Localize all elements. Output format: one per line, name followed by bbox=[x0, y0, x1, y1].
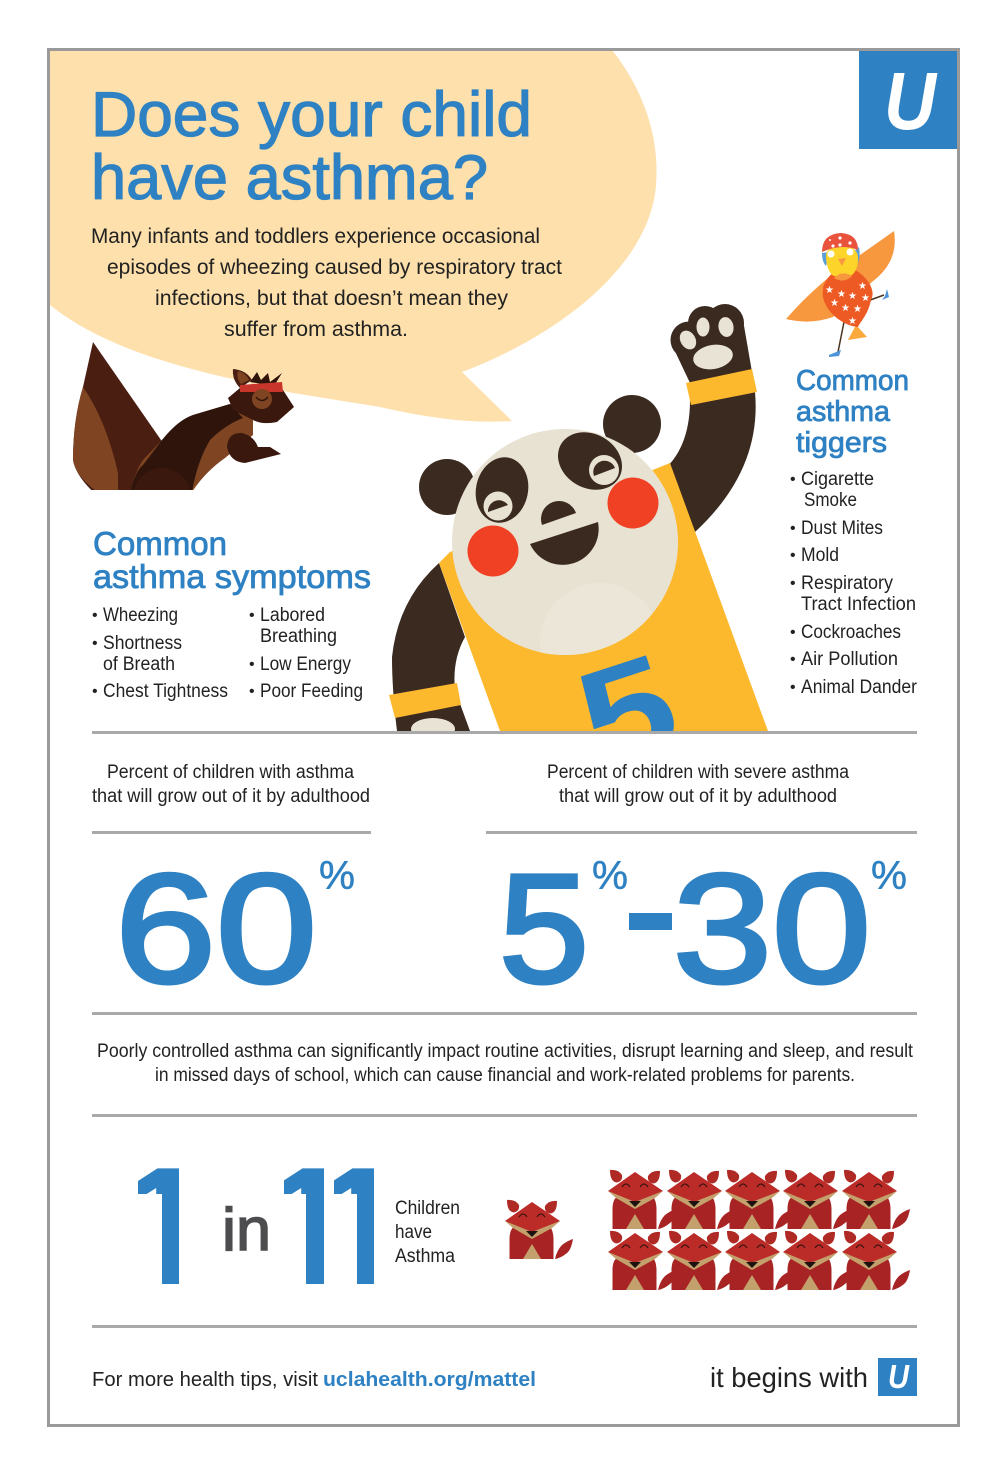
list: triggers: • bbox=[790, 624, 796, 641]
list: triggers: • bbox=[790, 679, 796, 696]
footer U logo bbox=[878, 1358, 917, 1396]
stat caption: 60 percent: Percent of children with asthma bbox=[107, 762, 354, 783]
logo: U badge bbox=[859, 51, 957, 149]
stat: 1 in 11: 1 bbox=[312, 1132, 405, 1320]
list: triggers: Smoke bbox=[804, 490, 857, 511]
list: triggers: Tract Infection bbox=[801, 594, 916, 615]
intro text: Many infants and toddlers experience occasional bbox=[91, 225, 540, 248]
icon: bird: ★ bbox=[858, 281, 867, 292]
icon: bird: ★ bbox=[837, 289, 846, 300]
heading: symptoms: Common bbox=[93, 525, 227, 562]
intro text: episodes of wheezing caused by respiratory tract bbox=[107, 256, 562, 279]
mouth bbox=[530, 522, 599, 565]
stat: 60%: 60 bbox=[115, 842, 317, 1015]
stat caption: 5-30 percent: that will grow out of it by adulthood bbox=[559, 786, 837, 807]
title bbox=[91, 80, 532, 213]
icon: bird: ★ bbox=[841, 303, 850, 314]
heading: symptoms bbox=[93, 525, 371, 595]
list: symptoms: Poor Feeding bbox=[260, 681, 363, 702]
stat label: have bbox=[395, 1222, 432, 1243]
list: triggers: Animal Dander bbox=[801, 677, 918, 698]
stat label: Children bbox=[395, 1198, 460, 1219]
list: symptoms: Breathing bbox=[260, 626, 337, 647]
stat caption: 60 percent bbox=[92, 762, 370, 807]
paw pads raised bbox=[680, 317, 734, 370]
icon: bird: ★ bbox=[861, 293, 870, 304]
raised paw bbox=[670, 304, 752, 385]
title: Does your child bbox=[91, 80, 532, 150]
intro text bbox=[91, 225, 562, 341]
list: symptoms: Shortness bbox=[103, 633, 182, 654]
list: triggers: Mold bbox=[801, 545, 839, 566]
stat: 1 in 11 bbox=[138, 1168, 374, 1284]
stat caption: 5-30 percent bbox=[547, 762, 849, 807]
stat: 1 in 11: 1 bbox=[117, 1132, 210, 1320]
heading: triggers bbox=[796, 365, 909, 459]
icon: bird: ★ bbox=[825, 285, 834, 296]
list: symptoms: Labored bbox=[260, 605, 325, 626]
divider lines bbox=[92, 731, 917, 1328]
list: triggers: • bbox=[790, 575, 796, 592]
stat: 5-30%: % bbox=[871, 854, 907, 898]
lower paw pad bbox=[411, 718, 455, 731]
list: symptoms: Chest Tightness bbox=[103, 681, 228, 702]
icon: bird: ★ bbox=[848, 291, 857, 302]
stat: 60%: % bbox=[319, 854, 355, 898]
list: triggers: • bbox=[790, 471, 796, 488]
stat: 1 in 11: in bbox=[222, 1196, 271, 1263]
list: symptoms: Wheezing bbox=[103, 605, 178, 626]
list: triggers: • bbox=[790, 547, 796, 564]
stat: 5-30% bbox=[499, 842, 907, 1015]
icon: bird bbox=[786, 231, 895, 357]
list: symptoms: • bbox=[92, 635, 98, 652]
footer U logo: U bbox=[888, 1358, 910, 1395]
list: symptoms: Low Energy bbox=[260, 654, 351, 675]
jersey bbox=[439, 463, 768, 731]
icon: squirrel bbox=[73, 342, 294, 490]
icon: single fox bbox=[505, 1200, 573, 1259]
list: symptoms: • bbox=[249, 656, 255, 673]
icon: panda bbox=[389, 304, 768, 731]
list: symptoms: • bbox=[249, 683, 255, 700]
impact paragraph: in missed days of school, which can cause financial and work-related problems for parents. bbox=[155, 1065, 855, 1086]
logo: U badge: U bbox=[884, 56, 938, 147]
list: triggers: Dust Mites bbox=[801, 518, 883, 539]
belly bbox=[540, 614, 652, 655]
left arm bbox=[392, 563, 470, 731]
heading: triggers: Common bbox=[796, 365, 909, 397]
heading: triggers: asthma bbox=[796, 396, 891, 428]
stat: 1 in 11: 1 bbox=[262, 1132, 355, 1320]
icon: bird: ★ bbox=[848, 316, 857, 327]
list: triggers: • bbox=[790, 520, 796, 537]
intro text: suffer from asthma. bbox=[224, 318, 408, 341]
stat caption: 5-30 percent: Percent of children with severe asthma bbox=[547, 762, 849, 783]
footer link text: For more health tips, visit bbox=[92, 1369, 318, 1391]
wrist bands bbox=[389, 369, 757, 718]
right arm bbox=[670, 392, 756, 532]
intro text: infections, but that doesn’t mean they bbox=[155, 287, 509, 310]
head bbox=[452, 429, 678, 655]
list: symptoms: • bbox=[92, 607, 98, 624]
ears bbox=[603, 395, 661, 453]
nose bbox=[541, 501, 576, 525]
cheeks bbox=[608, 478, 658, 528]
jersey number: 5 bbox=[560, 623, 696, 800]
list: triggers: Cockroaches bbox=[801, 622, 901, 643]
stat: 5-30%: 5 bbox=[499, 842, 589, 1015]
pictogram: ten foxes bbox=[608, 1170, 910, 1290]
stat: 5-30%: 30 bbox=[673, 842, 871, 1015]
stat label: Asthma bbox=[395, 1246, 455, 1267]
list: symptoms: of Breath bbox=[103, 654, 175, 675]
heading: triggers: tiggers bbox=[796, 427, 887, 459]
eye patches bbox=[558, 432, 622, 490]
impact paragraph: Poorly controlled asthma can significantly impact routine activities, disrupt learning and sleep, and result bbox=[97, 1041, 914, 1062]
list: triggers: Cigarette bbox=[801, 469, 874, 490]
tagline: it begins with bbox=[710, 1362, 868, 1393]
footer url: uclahealth.org/mattel bbox=[323, 1369, 536, 1391]
list: symptoms bbox=[92, 605, 363, 702]
list: triggers: • bbox=[790, 651, 796, 668]
list: triggers bbox=[790, 469, 918, 698]
icon: bird: ★ bbox=[853, 304, 862, 315]
heading: symptoms: asthma symptoms bbox=[93, 558, 371, 595]
impact paragraph bbox=[97, 1041, 914, 1086]
eyes bbox=[589, 455, 619, 485]
list: triggers: Respiratory bbox=[801, 573, 893, 594]
speech bubble bbox=[50, 50, 657, 422]
list: symptoms: • bbox=[249, 607, 255, 624]
stat: 5-30%: % bbox=[592, 854, 628, 898]
stat caption: 60 percent: that will grow out of it by adulthood bbox=[92, 786, 370, 807]
list: triggers: Air Pollution bbox=[801, 649, 898, 670]
icon: bird: ★ bbox=[830, 298, 839, 309]
list: symptoms: • bbox=[92, 683, 98, 700]
title: have asthma? bbox=[91, 143, 488, 213]
stat label bbox=[395, 1198, 460, 1267]
